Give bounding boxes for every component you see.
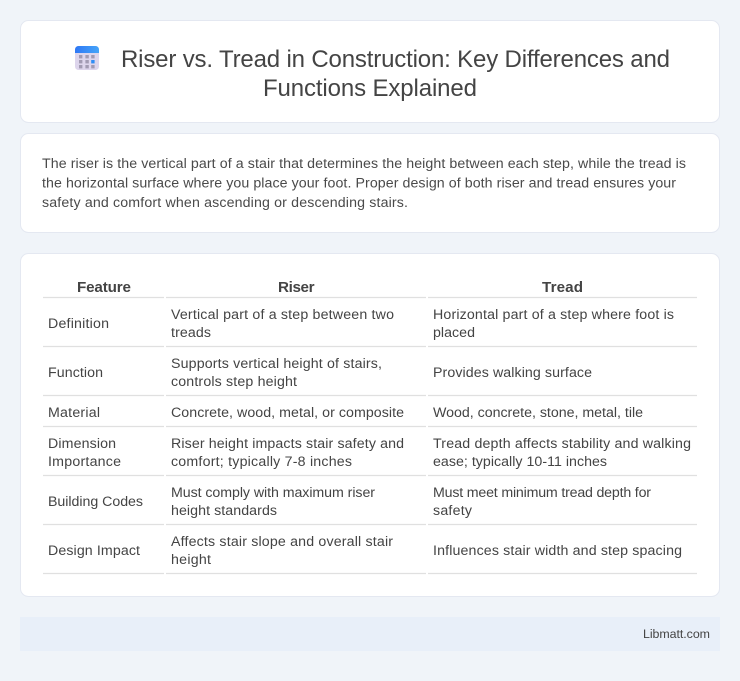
- row: definition: Vertical part of a step between two: [171, 307, 394, 323]
- title: Riser vs. Tread in Construction: Key Differences and: [121, 46, 670, 73]
- row: dimension importance: ease; typically 10-11 inches: [433, 454, 607, 470]
- row: dimension importance: [48, 436, 691, 470]
- row: definition: [48, 307, 674, 341]
- row: dimension importance: Importance: [48, 454, 121, 470]
- row: design impact: Design Impact: [48, 543, 140, 559]
- row: design impact: Influences stair width and step spacing: [433, 543, 682, 559]
- row: function: controls step height: [171, 374, 297, 390]
- row: function: Function: [48, 365, 103, 381]
- row: dimension importance: Riser height impacts stair safety and: [171, 436, 404, 452]
- table header: [77, 279, 583, 296]
- footer: [20, 617, 720, 651]
- row: building codes: [48, 485, 651, 519]
- row: definition: Horizontal part of a step where foot is: [433, 307, 674, 323]
- panel: title card: [20, 20, 720, 122]
- row: building codes: Building Codes: [48, 494, 143, 510]
- title: Functions Explained: [263, 75, 477, 102]
- text block: introduction: The riser is the vertical part of a stair that determines the height between each step, while the tread is: [42, 156, 686, 172]
- row: definition: placed: [433, 325, 475, 341]
- row: function: Supports vertical height of stairs,: [171, 356, 382, 372]
- row: building codes: height standards: [171, 503, 277, 519]
- table header: Tread: [542, 279, 583, 296]
- text block: introduction: [42, 156, 686, 211]
- footer: Libmatt.com: [643, 627, 710, 641]
- row: material: Concrete, wood, metal, or composite: [171, 405, 404, 421]
- row: building codes: Must comply with maximum riser: [171, 485, 375, 501]
- row: design impact: [48, 534, 682, 568]
- title: [121, 46, 670, 102]
- panel: comparison table: [20, 254, 720, 596]
- row: dimension importance: Dimension: [48, 436, 116, 452]
- table header: Feature: [77, 279, 131, 296]
- text block: introduction: safety and comfort when ascending or descending stairs.: [42, 195, 408, 211]
- row: building codes: Must meet minimum tread depth for: [433, 485, 651, 501]
- row: material: Wood, concrete, stone, metal, tile: [433, 405, 643, 421]
- row: function: Provides walking surface: [433, 365, 592, 381]
- row: material: Material: [48, 405, 100, 421]
- row: definition: Definition: [48, 316, 109, 332]
- row: dimension importance: Tread depth affects stability and walking: [433, 436, 691, 452]
- row: dimension importance: comfort; typically 7-8 inches: [171, 454, 352, 470]
- text block: introduction: the horizontal surface where you place your foot. Proper design of both riser and tread ensures your: [42, 176, 676, 192]
- row: building codes: safety: [433, 503, 473, 519]
- row: design impact: Affects stair slope and overall stair: [171, 534, 393, 550]
- row: function: [48, 356, 592, 390]
- row: design impact: height: [171, 552, 211, 568]
- icon: calendar: [75, 46, 99, 70]
- row: material: [48, 405, 643, 421]
- panel: introduction: [20, 134, 720, 232]
- row: definition: treads: [171, 325, 211, 341]
- table header: Riser: [278, 279, 315, 296]
